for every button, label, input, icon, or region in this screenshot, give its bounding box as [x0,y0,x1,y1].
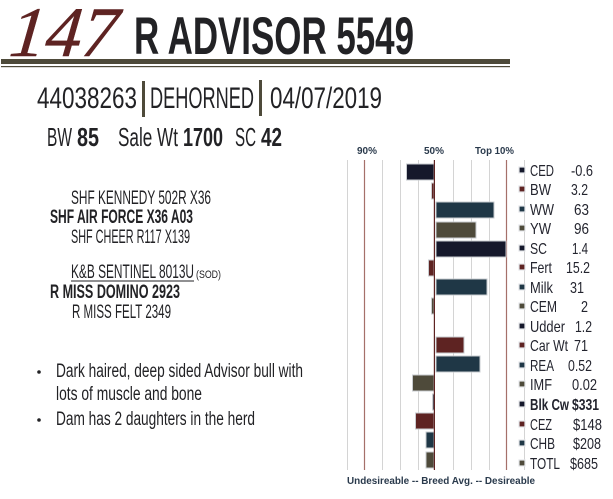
legend: $208 [573,436,601,453]
chart top labels: 90% [357,146,377,157]
legend: Blk Cw [530,397,569,414]
legend: TOTL [530,456,560,473]
legend: -0.6 [571,163,593,180]
notes: lots of muscle and bone [56,384,202,405]
pedigree: SHF KENNEDY 502R X36 [71,188,211,209]
pedigree [50,188,221,323]
legend: $331 [572,397,599,414]
pedigree: K&B SENTINEL 8013U [71,262,194,283]
pedigree: R MISS FELT 2349 [72,302,171,323]
legend: $148 [573,417,602,434]
notes: Dark haired, deep sided Advisor bull with [56,361,303,382]
measurements [47,122,282,152]
pedigree: (SOD) [196,269,221,281]
legend: CEZ [530,417,552,434]
legend: IMF [530,377,552,394]
pedigree: SHF CHEER R117 X139 [71,227,190,248]
legend: SC [530,241,547,258]
header rule [1,59,510,67]
legend: 71 [574,338,588,355]
legend: CEM [530,299,557,316]
legend: CHB [530,436,555,453]
separator [142,81,145,117]
legend: 0.02 [572,377,597,394]
bull name: R ADVISOR 5549 [134,7,414,66]
legend: 1.4 [572,241,588,258]
pedigree: SHF AIR FORCE X36 A03 [50,207,193,228]
legend: 1.2 [575,319,592,336]
legend: WW [530,202,555,219]
notes: Dam has 2 daughters in the herd [56,409,255,430]
chart bottom label: Undesireable -- Breed Avg. -- Desireable [347,476,535,487]
average line [434,160,435,470]
chart top labels: Top 10% [475,146,514,157]
birth date: 04/07/2019 [270,82,382,115]
legend: 0.52 [568,358,592,375]
measurements: 42 [261,122,282,152]
legend: REA [530,358,554,375]
separator [259,80,262,116]
measurements: 1700 [183,122,223,152]
legend: Milk [530,280,554,297]
registration number: 44038263 [37,82,137,115]
measurements: 85 [77,122,99,152]
legend: 2 [581,299,588,316]
bars [406,164,506,468]
measurements: Sale Wt [118,122,179,152]
registration line [37,80,382,117]
legend: Udder [530,319,566,336]
legend: 96 [574,221,589,238]
legend: YW [530,221,552,238]
legend: CED [530,163,554,180]
notes [37,361,303,430]
legend: BW [530,182,552,199]
legend: 3.2 [571,182,588,199]
measurements: SC [235,122,256,152]
chart top labels [357,146,514,157]
legend: $685 [570,456,598,473]
chart top labels: 50% [424,146,444,157]
legend: Fert [530,260,552,277]
legend: Car Wt [530,338,568,355]
legend: 63 [574,202,589,219]
measurements: BW [47,122,72,152]
legend: 15.2 [566,260,590,277]
header [1,0,510,72]
pedigree: R MISS DOMINO 2923 [50,282,180,303]
horn status: DEHORNED [150,82,254,115]
legend: 31 [570,280,584,297]
EPD bar chart [347,146,602,487]
legend [519,163,602,473]
